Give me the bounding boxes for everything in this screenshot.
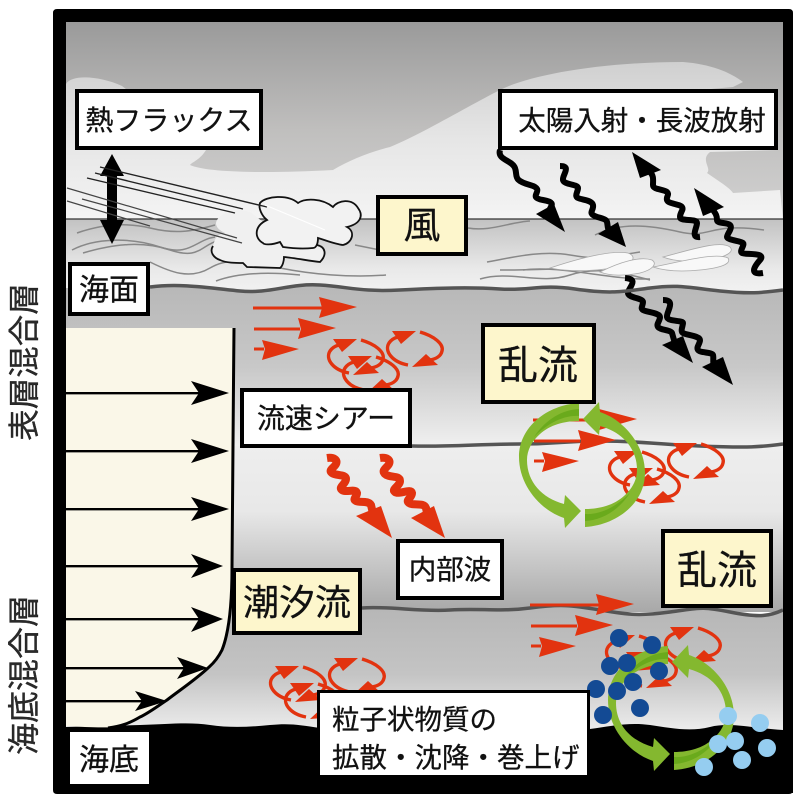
label: solar and longwave radiation: 太陽入射・長波放射 bbox=[518, 105, 766, 136]
heat flux double arrow bbox=[100, 154, 124, 244]
green turbulence loop upper bbox=[519, 402, 645, 528]
label: tidal current bbox=[234, 570, 360, 633]
label: seabed bbox=[70, 732, 149, 784]
side label: surface mixed layer: 表層混合層 bbox=[6, 283, 42, 441]
label: seabed: 海底 bbox=[79, 744, 139, 777]
eddies middle bbox=[610, 443, 723, 504]
label: internal waves bbox=[398, 541, 502, 598]
velocity shear arrows lower bbox=[530, 594, 634, 657]
label: velocity shear bbox=[242, 390, 410, 446]
sediment particles light bbox=[695, 707, 776, 776]
clouds in sky bbox=[66, 62, 783, 220]
velocity shear arrows middle bbox=[533, 409, 637, 472]
label: velocity shear: 流速シアー bbox=[257, 403, 395, 434]
green turbulence loop lower bbox=[608, 645, 734, 771]
eddies upper bbox=[329, 331, 442, 392]
label: wind: 風 bbox=[404, 205, 440, 246]
label: particulate matter: 拡散・沈降・巻上げ bbox=[332, 742, 580, 773]
panel: bottom mixed layer bbox=[66, 606, 783, 732]
thermocline line bbox=[412, 441, 783, 447]
label: turbulence upper bbox=[483, 325, 594, 402]
sea surface line bbox=[150, 285, 783, 293]
seabed bbox=[66, 723, 793, 793]
wave crests bbox=[550, 245, 731, 275]
tidal profile curve bbox=[108, 328, 234, 728]
tidal current profile panel bbox=[66, 328, 234, 727]
tidal velocity arrows bbox=[66, 381, 229, 711]
label: turbulence upper: 乱流 bbox=[498, 344, 578, 388]
eddies near seabed bbox=[271, 658, 384, 719]
sea surface waves bbox=[72, 221, 764, 281]
solar radiation down arrow 2 bbox=[560, 166, 626, 247]
panel: interior layer bbox=[66, 441, 783, 612]
suspended particles dark bbox=[587, 629, 668, 724]
panel: near-surface layer bbox=[66, 219, 783, 294]
wind streak lines bbox=[67, 167, 325, 243]
label: turbulence lower: 乱流 bbox=[677, 549, 757, 593]
solar radiation down arrow 1 bbox=[500, 150, 565, 232]
label: tidal current: 潮汐流 bbox=[243, 582, 351, 623]
label: heat flux bbox=[77, 91, 261, 148]
eddies lower bbox=[607, 627, 720, 688]
label: turbulence lower bbox=[663, 531, 771, 606]
longwave radiation up arrow 2 bbox=[694, 188, 763, 273]
label: solar and longwave radiation bbox=[500, 91, 776, 148]
panel: sky background bbox=[60, 16, 790, 226]
label: wind bbox=[378, 197, 466, 254]
internal wave arrow 2 bbox=[380, 458, 445, 538]
wind puff upper bbox=[257, 197, 361, 248]
penetrating radiation arrow 2 bbox=[663, 300, 733, 385]
wind puff lower bbox=[212, 210, 325, 268]
label: heat flux: 熱フラックス bbox=[85, 105, 253, 136]
horizon line bbox=[66, 218, 783, 220]
wind puff outline bbox=[212, 245, 325, 268]
side label: bottom mixed layer: 海底混合層 bbox=[6, 595, 42, 755]
label: particulate matter bbox=[318, 692, 588, 776]
penetrating radiation arrow 1 bbox=[625, 278, 693, 363]
label: internal waves: 内部波 bbox=[409, 554, 491, 585]
label: particulate matter: 粒子状物質の bbox=[332, 704, 497, 735]
longwave radiation up arrow 1 bbox=[632, 152, 700, 237]
panel: surface mixed layer bbox=[66, 285, 783, 446]
internal wave arrow 1 bbox=[327, 458, 392, 538]
lower density interface line bbox=[362, 606, 783, 616]
velocity shear arrows upper bbox=[253, 297, 357, 360]
label: sea surface bbox=[70, 264, 148, 314]
label: sea surface: 海面 bbox=[79, 274, 139, 307]
